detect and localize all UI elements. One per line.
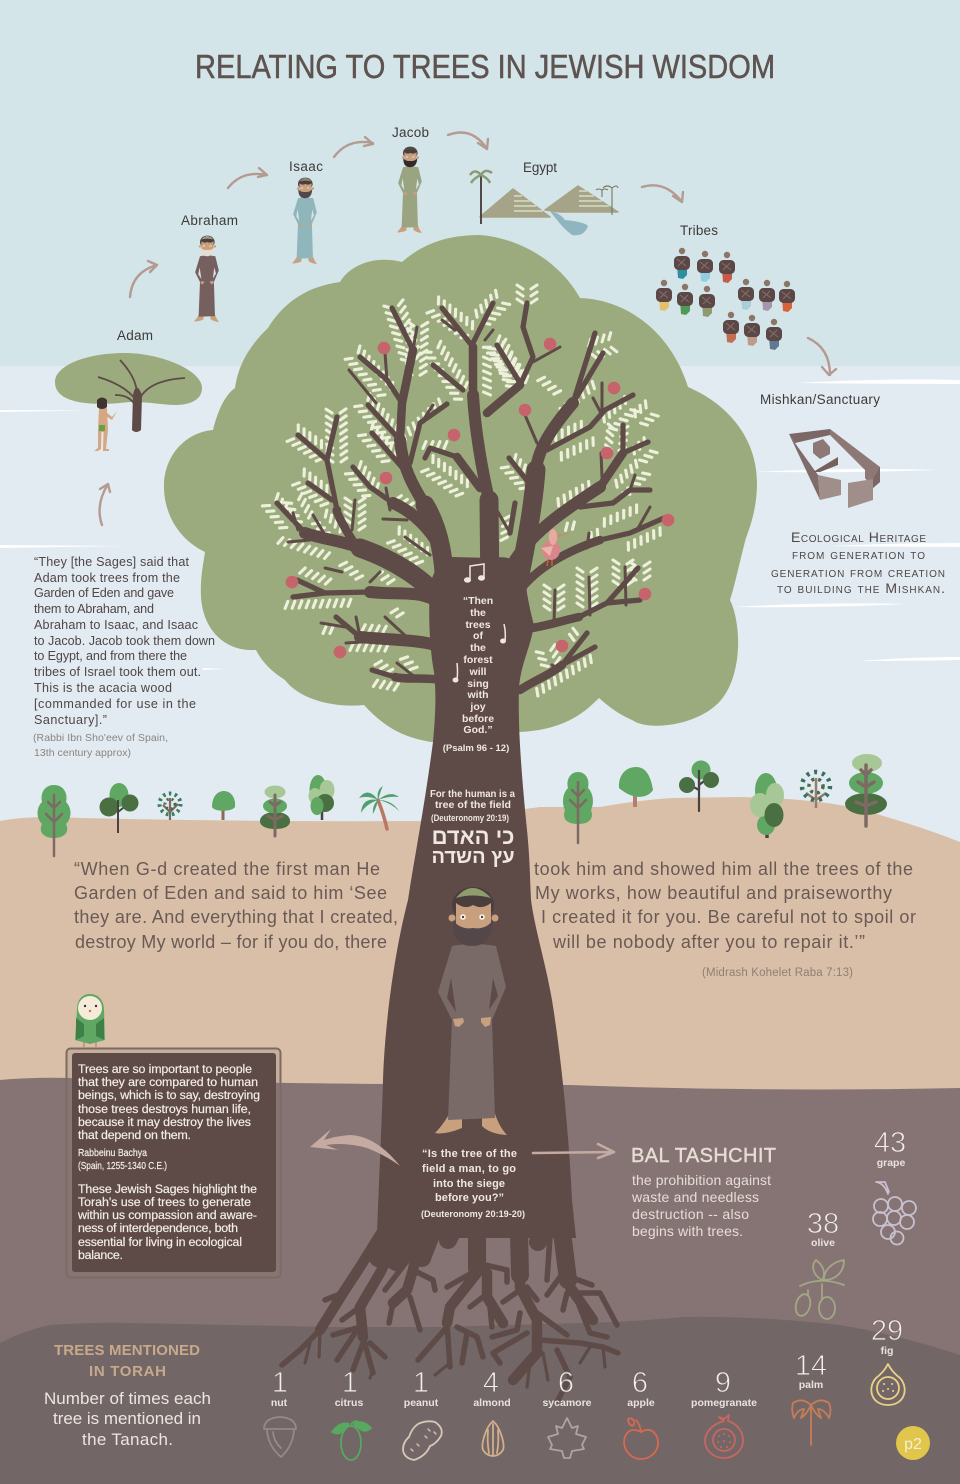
label: Mishkan: Mishkan/Sanctuary [760, 392, 880, 407]
canopy [164, 235, 757, 742]
label: Isaac: Isaac [289, 159, 323, 174]
item: nut: 1 [272, 1367, 288, 1399]
label: Abraham: Abraham [181, 213, 238, 228]
text: bal tashchit: begins with trees. [632, 1223, 743, 1239]
panel: sages box: those trees destroys human life, [78, 1102, 251, 1116]
text: midrash quote left: they are. And everything that I created, [74, 907, 398, 927]
arrow: to bal tashchit [533, 1144, 614, 1158]
title: RELATING TO TREES IN JEWISH WISDOM [195, 48, 775, 85]
text: sages quote: 13th century approx) [34, 747, 131, 759]
ground mid soil [0, 1078, 960, 1484]
text: psalm quote: will [469, 666, 487, 678]
item: citrus: citrus [335, 1397, 363, 1409]
text: trees mentioned: tree is mentioned in [53, 1409, 201, 1428]
text: sages quote: Sanctuary].” [34, 713, 107, 727]
item: palm: palm [799, 1379, 823, 1391]
text: midrash quote right: will be nobody after you to repair it.’” [552, 932, 865, 952]
text: bal tashchit: destruction -- also [632, 1206, 749, 1222]
arrow: to sages box [310, 1129, 400, 1166]
text: siege quote: into the siege [433, 1178, 505, 1190]
item: apple: 6 [632, 1367, 648, 1399]
text: midrash quote left [74, 859, 398, 952]
text: sages quote: (Rabbi Ibn Sho'eev of Spain, [33, 732, 168, 744]
text: siege quote: before you?” [435, 1192, 504, 1204]
text: sages quote: tribes of Israel took them out. [34, 665, 201, 679]
panel: sages box [66, 1048, 280, 1278]
text: siege quote: field a man, to go [422, 1163, 516, 1175]
text: sages quote: [commanded for use in the [34, 697, 196, 711]
item: peanut [403, 1367, 442, 1460]
text: ecological heritage [771, 529, 945, 596]
text: trees mentioned: IN TORAH [89, 1363, 166, 1380]
text: psalm quote: before [462, 713, 494, 725]
text: psalm quote: forest [463, 654, 493, 666]
text: midrash quote right [534, 859, 916, 979]
label: Adam: Adam [117, 328, 153, 343]
figure: man in trunk [435, 887, 507, 1135]
illustration: Adam and acacia tree [55, 353, 202, 451]
item: almond [473, 1367, 511, 1456]
panel: sages box: beings, which is to say, destroying [78, 1088, 260, 1102]
text: bal tashchit: BAL TASHCHIT [631, 1145, 776, 1167]
label: Egypt: Egypt [523, 160, 557, 175]
text: sages quote: them to Abraham, and [34, 602, 154, 616]
text: human is a tree of the field: (Deuteronomy 20:19) [431, 813, 509, 823]
item: peanut: 1 [413, 1367, 429, 1399]
arrows: journey [100, 132, 836, 525]
large tree [164, 235, 757, 1400]
text: human is a tree of the field [430, 788, 515, 868]
page badge [896, 1426, 930, 1460]
item: fig: 29 [871, 1315, 903, 1347]
figure: Isaac [292, 178, 317, 264]
text: trees mentioned [44, 1342, 211, 1449]
panel: sages box: that depend on them. [78, 1128, 191, 1142]
item: palm: 14 [795, 1350, 827, 1382]
illustration: twelve tribes [656, 248, 795, 350]
item: sycamore: 6 [558, 1367, 574, 1399]
text: sages quote: Adam took trees from the [34, 571, 180, 585]
icon: green owl [75, 994, 105, 1047]
text: human is a tree of the field: כי האדם [432, 824, 514, 849]
item: apple: apple [627, 1397, 655, 1409]
text: midrash quote left: destroy My world – for if you do, there [75, 932, 387, 952]
text: ecological heritage: from generation to [792, 546, 925, 562]
item: sycamore [542, 1367, 592, 1458]
text: midrash quote right: took him and showed him all the trees of the [534, 859, 913, 879]
text: bal tashchit: waste and needless [631, 1189, 759, 1205]
item: grape: 43 [874, 1127, 906, 1159]
text: sages quote: This is the acacia wood [34, 681, 172, 695]
text: psalm quote: God.” [463, 724, 493, 736]
item: almond: 4 [483, 1367, 499, 1399]
item: grape: grape [877, 1157, 905, 1169]
text: psalm quote: sing [467, 678, 489, 690]
apples [286, 338, 674, 658]
panel: sages box: Rabbeinu Bachya [78, 1148, 147, 1159]
ground tan [0, 797, 960, 1100]
item: nut: nut [271, 1397, 288, 1409]
text: psalm quote: trees [465, 619, 491, 631]
figure: Jacob [397, 147, 422, 233]
leaves [261, 282, 667, 696]
text: trees mentioned: Number of times each [44, 1389, 211, 1408]
text: midrash quote right: I created it for you. Be careful not to spoil or [541, 907, 916, 927]
panel: sages box: that they are compared to human [78, 1075, 258, 1089]
item: grape [873, 1127, 916, 1244]
item: palm [792, 1350, 830, 1445]
item: olive: 38 [807, 1208, 839, 1240]
text: sages quote [33, 555, 215, 759]
panel: sages box: essential for living in ecological [78, 1235, 242, 1249]
text: sages quote: Abraham to Isaac, and Isaac [34, 618, 198, 632]
text: siege quote: (Deuteronomy 20:19-20) [421, 1209, 525, 1220]
item: fig: fig [881, 1345, 893, 1357]
panel: sages box: within us compassion and aware- [77, 1208, 257, 1222]
item: apple [624, 1367, 658, 1459]
item: olive: olive [811, 1237, 835, 1249]
text: psalm quote: the [470, 642, 486, 654]
text: midrash quote right: My works, how beautiful and praiseworthy [535, 883, 892, 903]
text: psalm quote: of [473, 630, 483, 642]
item: citrus: 1 [342, 1367, 358, 1399]
text: bal tashchit [631, 1145, 776, 1239]
text: sages quote: “They [the Sages] said that [34, 555, 190, 569]
text: sages quote: to Egypt, and from there the [34, 649, 187, 663]
text: psalm quote: (Psalm 96 - 12) [443, 743, 509, 754]
panel: sages box: Trees are so important to people [78, 1062, 252, 1076]
panel: sages box: ness of interdependence, both [78, 1221, 238, 1235]
item: pomegranate: pomegranate [691, 1397, 757, 1409]
panel: sages box: balance. [78, 1248, 123, 1262]
text: midrash quote left: Garden of Eden and said to him ‘See [74, 883, 387, 903]
text: sages quote: Garden of Eden and gave [34, 586, 174, 600]
panel: sages box: These Jewish Sages highlight the [78, 1182, 257, 1196]
branches [277, 303, 664, 690]
text: midrash quote left: “When G-d created the first man He [74, 859, 380, 879]
text: psalm quote [443, 595, 509, 754]
ground bottom soil [0, 1317, 960, 1484]
row of trees right [563, 754, 887, 843]
item: citrus [332, 1367, 371, 1460]
text: ecological heritage: to building the Mishkan. [777, 580, 945, 596]
roots [282, 1230, 618, 1400]
text: psalm quote: joy [469, 701, 486, 713]
icon: music notes [453, 564, 505, 682]
panel: sages box: Torah's use of trees to generate [78, 1195, 251, 1209]
trunk [377, 557, 576, 1238]
text: psalm quote: the [470, 607, 486, 619]
icon: bird on branch [541, 529, 570, 566]
text: trees mentioned: TREES MENTIONED [54, 1342, 200, 1359]
text: human is a tree of the field: עץ השדה [431, 846, 515, 868]
text: midrash quote right: (Midrash Kohelet Raba 7:13) [702, 967, 853, 979]
item: almond: almond [473, 1397, 511, 1409]
item: sycamore: sycamore [542, 1397, 592, 1409]
text: human is a tree of the field: For the human is a [430, 788, 515, 800]
illustration: Egypt pyramids and palm [470, 171, 618, 235]
label: Tribes: Tribes [680, 223, 718, 238]
text: bal tashchit: the prohibition against [632, 1172, 771, 1188]
panel: sages box: (Spain, 1255-1340 C.E.) [78, 1161, 167, 1172]
text: psalm quote: “Then [463, 595, 493, 607]
figure: Abraham [194, 236, 219, 322]
page badge: p2 [904, 1436, 922, 1453]
text: sages quote: to Jacob. Jacob took them down [34, 634, 215, 648]
text: siege quote [421, 1148, 525, 1220]
text: trees mentioned: the Tanach. [82, 1430, 173, 1449]
panel: sages box: because it may destroy the lives [78, 1115, 251, 1129]
item: pomegranate [691, 1367, 757, 1458]
item: fig [871, 1315, 905, 1405]
item: pomegranate: 9 [715, 1367, 731, 1399]
row of trees left [38, 775, 399, 856]
label: Jacob: Jacob [392, 125, 429, 140]
text: ecological heritage: Ecological Heritage [791, 529, 926, 545]
text: human is a tree of the field: tree of the field [435, 799, 511, 811]
item: nut [264, 1367, 296, 1457]
text: psalm quote: with [466, 689, 488, 701]
item: olive [793, 1208, 844, 1319]
item: peanut: peanut [404, 1397, 439, 1409]
illustration: Mishkan walls [789, 429, 880, 508]
text: siege quote: “Is the tree of the [422, 1148, 517, 1160]
text: ecological heritage: generation from creation [771, 564, 945, 580]
